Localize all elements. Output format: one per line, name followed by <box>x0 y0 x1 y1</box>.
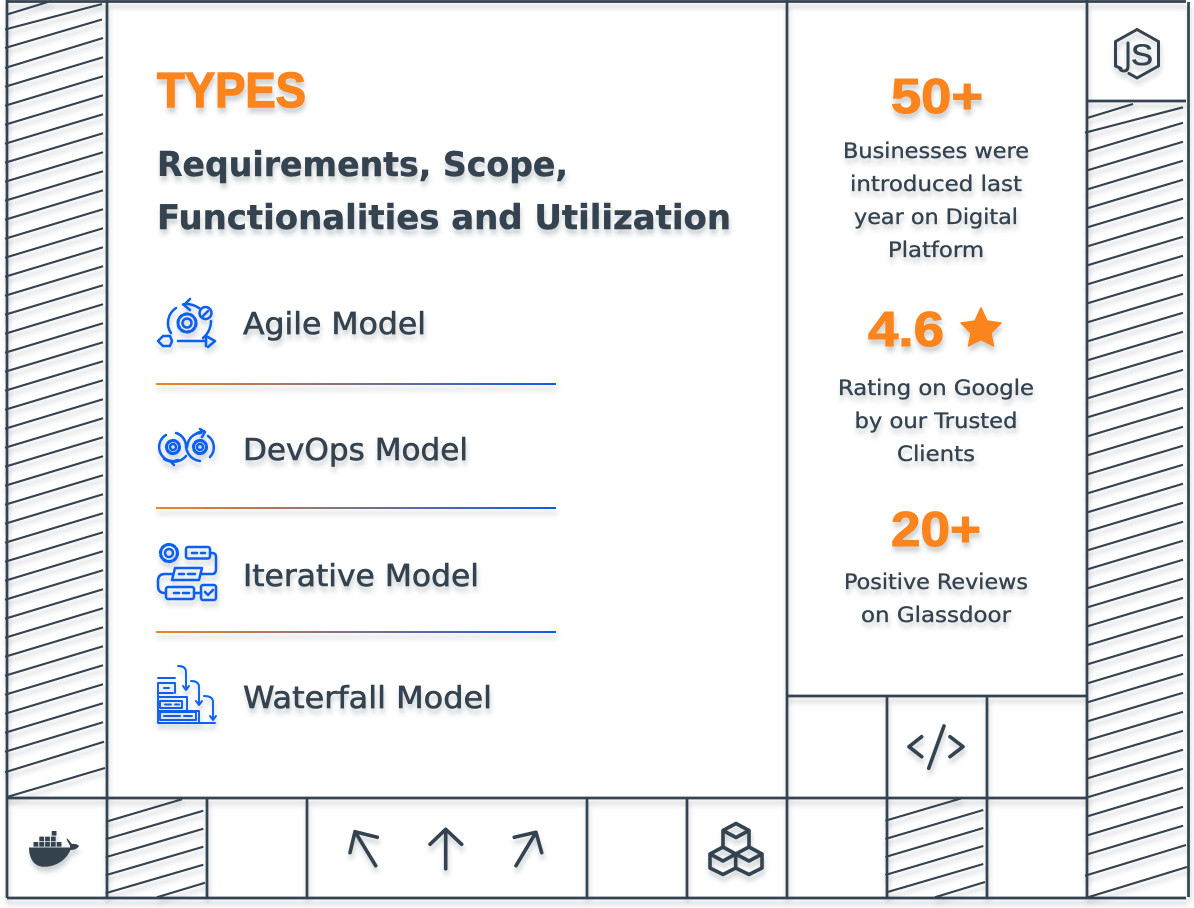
divider 2 <box>156 507 556 509</box>
icon: star <box>961 308 1001 346</box>
stat text: businesses: introduced last <box>850 172 1022 196</box>
item label: Waterfall Model: Waterfall Model <box>243 681 492 716</box>
icon: node js <box>1116 30 1158 78</box>
panel: right hatched column <box>1085 104 1187 897</box>
stat text: businesses: year on Digital <box>854 205 1018 229</box>
heading: Requirements, Scope, <box>157 145 568 185</box>
icon: blocks <box>710 824 762 874</box>
arrow: up <box>430 829 462 869</box>
stat: 20+: 20+ <box>891 503 981 557</box>
icon: devops cycle <box>159 429 214 465</box>
title: TYPES <box>157 64 306 118</box>
item label: DevOps Model: DevOps Model <box>243 433 468 468</box>
icon: docker whale <box>29 831 79 867</box>
stat: 20+ <box>844 503 1028 627</box>
stat: 50+: 50+ <box>891 70 983 124</box>
stat text: businesses <box>843 139 1029 262</box>
stat text: reviews: on Glassdoor <box>861 603 1011 627</box>
icon: waterfall stairs <box>158 666 216 723</box>
stat text: rating: by our Trusted <box>854 409 1018 433</box>
arrow: up right <box>514 832 542 866</box>
panel: left hatched column <box>5 1 105 797</box>
icon: agile cycle <box>158 299 215 347</box>
stat: 4.6 star: 4.6 <box>868 303 944 357</box>
stat text: businesses: Businesses were <box>843 139 1029 163</box>
icon: node js: S <box>1131 39 1153 72</box>
stat text: reviews: Positive Reviews <box>844 570 1028 594</box>
heading <box>157 145 731 238</box>
stat text: rating: Clients <box>897 442 975 466</box>
panel: bottom hatched cell right <box>885 798 985 897</box>
stat: 50+ <box>843 70 1029 262</box>
divider 3 <box>156 631 556 633</box>
heading: Functionalities and Utilization <box>157 198 731 238</box>
arrow: up left <box>350 832 377 866</box>
stat text: rating: Rating on Google <box>838 376 1034 400</box>
stat: 4.6 star <box>838 303 1034 466</box>
icon: code <box>909 726 963 768</box>
stat text: rating <box>838 376 1034 466</box>
item label: Agile Model: Agile Model <box>243 307 426 342</box>
stat text: reviews <box>844 570 1028 627</box>
item label: Iterative Model: Iterative Model <box>243 559 479 594</box>
panel: bottom hatched cell left <box>106 799 205 897</box>
icon: iterative flow <box>158 544 216 600</box>
stat text: businesses: Platform <box>888 238 984 262</box>
arrows: three directions <box>350 829 542 869</box>
divider 1 <box>156 383 556 385</box>
